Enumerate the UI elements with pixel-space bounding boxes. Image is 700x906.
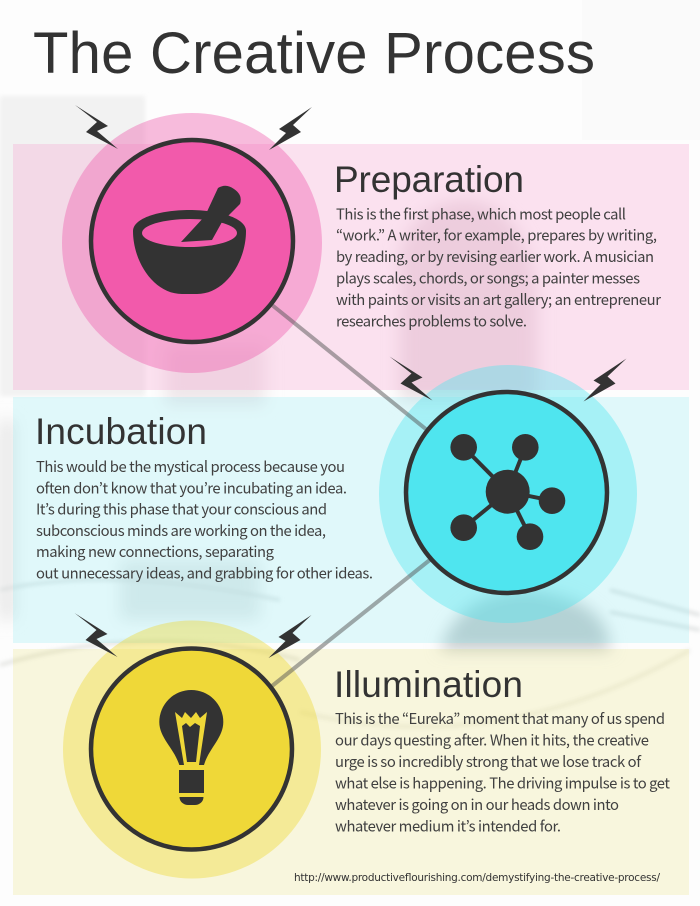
panel: preparation band <box>13 144 689 390</box>
connector: incubation to illumination <box>272 559 431 686</box>
heading: illumination: Illumination <box>334 664 523 705</box>
outer halo: cyan <box>379 365 637 623</box>
text block: incubation: often don’t know that you’re incubating an idea. <box>36 477 347 498</box>
text block: preparation: researches problems to solve. <box>336 310 527 331</box>
text block: illumination: whatever medium it’s intended for. <box>335 816 561 836</box>
text block: incubation <box>36 456 373 584</box>
text block: incubation: This would be the mystical process because you <box>36 456 345 477</box>
text block: illumination: what else is happening. The driving impulse is to get <box>335 772 670 794</box>
icon: illumination badge with light bulb <box>74 613 312 850</box>
text block: incubation: making new connections, separating <box>36 541 275 562</box>
source url: http://www.productiveflourishing.com/demystifying-the-creative-process/ <box>294 872 660 884</box>
text block: illumination: our days questing after. When it hits, the creative <box>335 730 649 750</box>
text block: preparation: “work.” A writer, for example, prepares by writing, <box>336 225 657 246</box>
connector: preparation to incubation <box>272 305 427 430</box>
text block: illumination <box>335 708 670 836</box>
outer halo: pink <box>62 113 322 373</box>
title: The Creative Process <box>33 21 595 86</box>
panel: illumination band <box>13 649 689 895</box>
text block: illumination: whatever is going on in our heads down into <box>335 794 619 815</box>
text block: incubation: It’s during this phase that your conscious and <box>36 499 327 520</box>
panel: incubation band <box>13 397 689 643</box>
text block: illumination: urge is so incredibly strong that we lose track of <box>335 751 642 772</box>
text block: incubation: subconscious minds are working on the idea, <box>36 520 326 541</box>
text block: illumination: This is the “Eureka” moment that many of us spend <box>335 708 665 729</box>
icon: incubation badge with network <box>390 356 626 593</box>
heading: incubation: Incubation <box>35 411 207 452</box>
text block: incubation: out unnecessary ideas, and grabbing for other ideas. <box>36 562 373 584</box>
outer halo: yellow <box>63 620 321 878</box>
text block: preparation: by reading, or by revising earlier work. A musician <box>336 246 654 267</box>
text block: preparation: plays scales, chords, or songs; a painter messes <box>336 268 640 288</box>
heading: preparation: Preparation <box>334 159 524 200</box>
text block: preparation <box>336 203 661 331</box>
text block: preparation: with paints or visits an art gallery; an entrepreneur <box>336 289 661 310</box>
icon: preparation badge with mortar and pestle <box>75 105 312 342</box>
text block: preparation: This is the first phase, which most people call <box>336 203 626 224</box>
